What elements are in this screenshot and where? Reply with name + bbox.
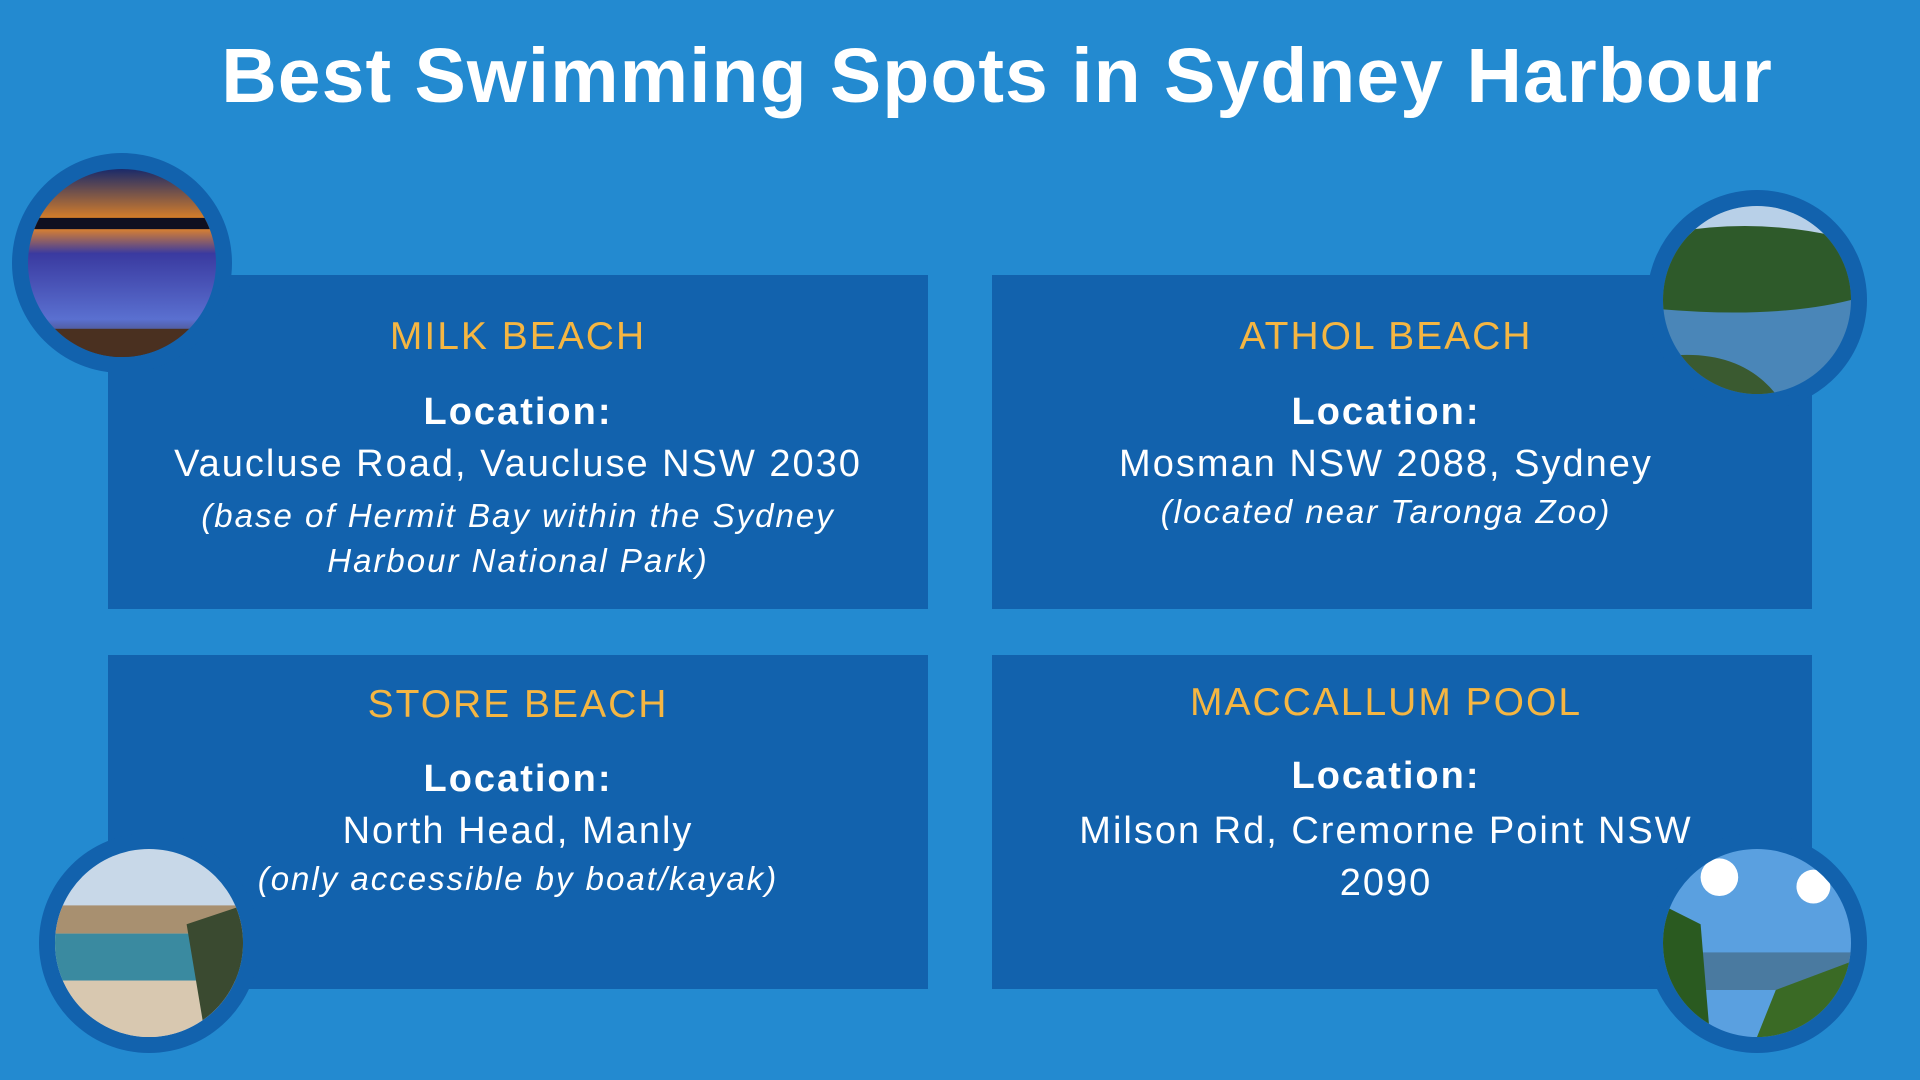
heading: STORE BEACH (368, 683, 668, 726)
address: Vaucluse Road, Vaucluse NSW 2030 (174, 443, 862, 485)
note: (only accessible by boat/kayak) (258, 860, 778, 897)
location label: Location: (1292, 755, 1480, 797)
panel: milk beach (108, 275, 928, 609)
heading: ATHOL BEACH (1240, 315, 1532, 358)
icon: maccallum pool photo (1647, 833, 1867, 1053)
address: Milson Rd, Cremorne Point NSW (1079, 810, 1693, 852)
address: 2090 (1340, 862, 1432, 904)
note (201, 497, 835, 579)
address (1079, 810, 1693, 904)
note: (located near Taronga Zoo) (1161, 493, 1611, 530)
location label: Location: (1292, 391, 1480, 433)
heading: MILK BEACH (390, 315, 646, 358)
heading: MACCALLUM POOL (1190, 681, 1582, 724)
location label: Location: (424, 391, 612, 433)
panel: athol beach (992, 275, 1812, 609)
note: Harbour National Park) (327, 542, 709, 579)
icon: store beach photo (39, 833, 259, 1053)
address: North Head, Manly (343, 810, 693, 852)
note: (base of Hermit Bay within the Sydney (201, 497, 835, 534)
icon: milk beach photo (12, 153, 232, 373)
panel: store beach (108, 655, 928, 989)
address: Mosman NSW 2088, Sydney (1119, 443, 1653, 485)
title: Best Swimming Spots in Sydney Harbour (221, 33, 1773, 119)
panel: maccallum pool (992, 655, 1812, 989)
location label: Location: (424, 758, 612, 800)
icon: athol beach photo (1647, 190, 1867, 410)
